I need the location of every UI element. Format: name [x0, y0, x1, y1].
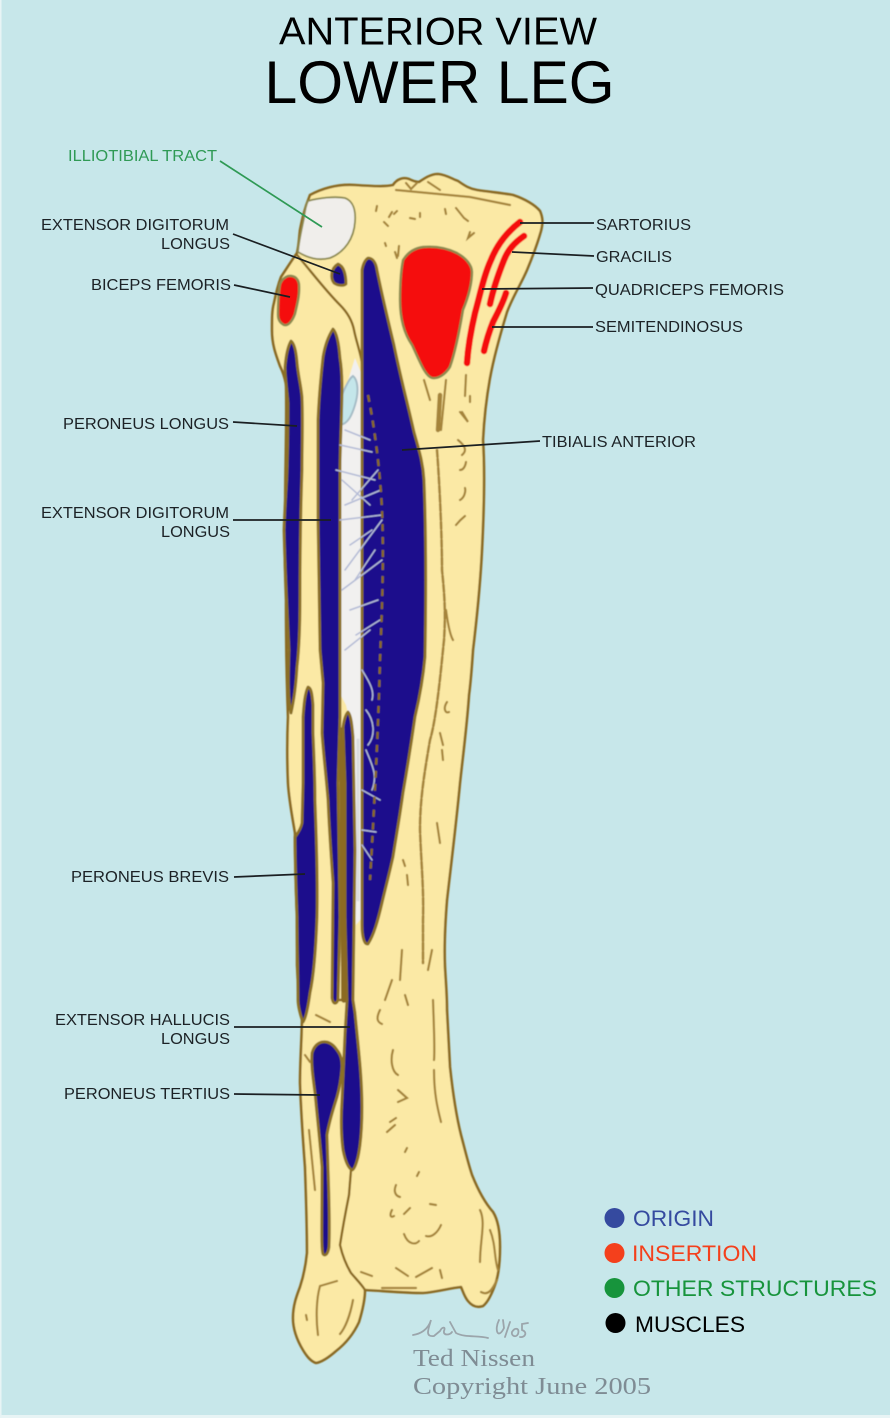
label: gracilis: GRACILIS — [596, 249, 672, 266]
label: illiotibial tract — [68, 148, 322, 227]
label: extensor digitorum longus upper: LONGUS — [161, 236, 230, 253]
bone surface texture — [305, 182, 510, 1335]
muscle origin: peroneus tertius — [312, 1042, 342, 1255]
label: biceps femoris: BICEPS FEMORIS — [91, 277, 231, 294]
label: peroneus longus — [63, 416, 297, 433]
muscle origin: peroneus brevis — [295, 687, 317, 1022]
muscle origin: tibialis anterior — [362, 258, 426, 944]
label: quadriceps femoris: QUADRICEPS FEMORIS — [595, 282, 784, 299]
credit text: Copyright June 2005 — [413, 1374, 651, 1400]
label: extensor digitorum longus lower: EXTENSOR DIGITORUM — [41, 505, 229, 522]
label: extensor hallucis longus: EXTENSOR HALLUCIS — [55, 1012, 230, 1029]
title: LOWER LEG — [264, 49, 614, 116]
label: tibialis anterior — [402, 434, 696, 451]
label: peroneus brevis: PERONEUS BREVIS — [71, 869, 229, 886]
muscle origin: extensor digitorum longus upper — [332, 264, 346, 285]
muscle insertion: large quadriceps red area — [400, 247, 472, 378]
legend — [604, 1206, 877, 1337]
interosseous membrane — [338, 358, 364, 925]
label: peroneus tertius: PERONEUS TERTIUS — [64, 1086, 230, 1103]
title — [264, 10, 614, 116]
label: extensor digitorum longus lower — [41, 505, 331, 541]
small membrane opening — [339, 376, 357, 425]
label: biceps femoris — [91, 277, 290, 297]
membrane and muscle overlying fibres — [336, 430, 382, 900]
label: illiotibial tract: ILLIOTIBIAL TRACT — [68, 148, 218, 165]
label: extensor hallucis longus: LONGUS — [161, 1031, 230, 1048]
muscle origin: extensor hallucis longus — [341, 712, 362, 1170]
leg bones illustration — [272, 174, 542, 1363]
label: tibialis anterior: TIBIALIS ANTERIOR — [542, 434, 696, 451]
label: gracilis — [512, 249, 672, 266]
label: extensor digitorum longus lower: LONGUS — [161, 524, 230, 541]
credit text — [413, 1346, 651, 1400]
label: extensor hallucis longus — [55, 1012, 350, 1048]
legend item: origin: ORIGIN — [633, 1206, 714, 1231]
label: sartorius: SARTORIUS — [596, 217, 691, 234]
brown band between extensor muscles — [342, 740, 344, 1000]
legend item: insertion: INSERTION — [632, 1241, 757, 1266]
label: peroneus longus: PERONEUS LONGUS — [63, 416, 229, 433]
legend item: other structures: OTHER STRUCTURES — [633, 1276, 877, 1301]
label: semitendinosus: SEMITENDINOSUS — [595, 319, 743, 336]
muscle origin: peroneus longus — [284, 341, 302, 713]
iliotibial tract insertion — [298, 197, 355, 259]
label: extensor digitorum longus upper: EXTENSOR DIGITORUM — [41, 217, 229, 234]
bone edge lines — [297, 255, 365, 1290]
muscle insertion: sartorius, gracilis, semitendinosus strips — [467, 222, 524, 363]
bone: tibia and fibula — [272, 174, 542, 1363]
artist signature — [413, 1320, 528, 1338]
title: ANTERIOR VIEW — [279, 10, 597, 54]
legend item: muscles: MUSCLES — [635, 1312, 745, 1337]
label: peroneus brevis — [71, 869, 305, 886]
muscle insertion: biceps femoris — [278, 276, 299, 325]
muscle origin: extensor digitorum longus main — [318, 329, 342, 1003]
credit text: Ted Nissen — [413, 1346, 535, 1372]
label: extensor digitorum longus upper — [41, 217, 340, 274]
tibial crest dashes — [368, 395, 383, 880]
